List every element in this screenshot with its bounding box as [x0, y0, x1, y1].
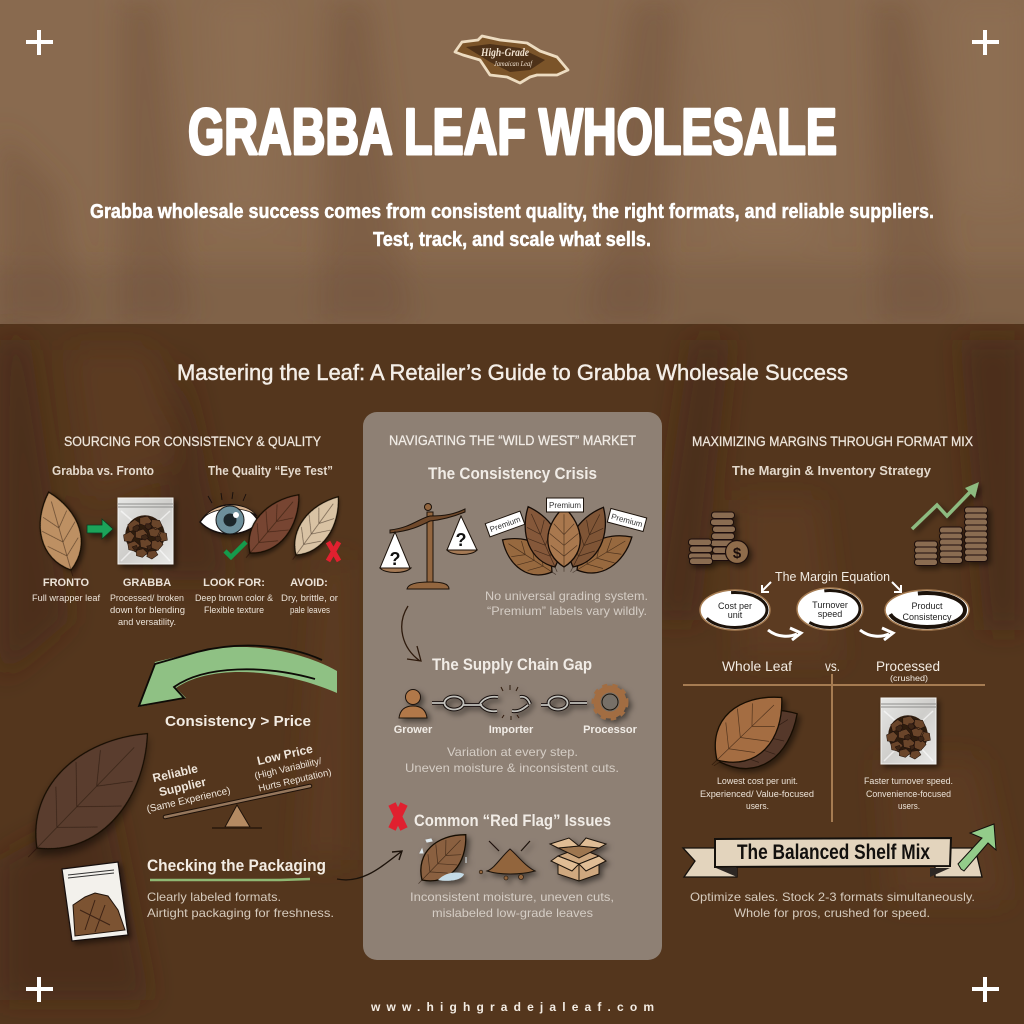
labels: look for: LOOK FOR:: [203, 577, 265, 589]
labels: grabba: Processed/ broken: [110, 593, 184, 603]
comparison header: (crushed): [890, 673, 928, 683]
icon: eye: [200, 492, 259, 534]
background: upper tobacco leaf band: [0, 0, 1024, 345]
icon: grower: [399, 690, 427, 718]
column heading: sourcing: SOURCING FOR CONSISTENCY & QUALITY: [64, 434, 321, 449]
labels: look for: [195, 577, 273, 615]
icon: dark leaf: [3, 709, 173, 882]
subheading: margin and inventory strategy: The Margin & Inventory Strategy: [732, 463, 932, 478]
labels: grabba: down for blending: [110, 605, 185, 615]
text: checking the packaging: Airtight packaging for freshness.: [147, 906, 334, 920]
text: checking the packaging: Clearly labeled formats.: [147, 890, 281, 904]
arrows: equation flow: [768, 628, 893, 640]
comparison grid lines: [683, 674, 985, 822]
subtitle: [90, 201, 934, 251]
arrows: equation pointers: [762, 582, 901, 592]
labels: grabba: and versatility.: [118, 617, 176, 627]
banner: balanced shelf mix: [683, 838, 982, 877]
subtitle: Grabba wholesale success comes from consistent quality, the right formats, and reliable suppliers.: [90, 201, 934, 223]
labels: supply chain stages: [394, 724, 638, 736]
text: checking the packaging: Checking the Packaging: [147, 857, 326, 875]
icon: banner green arrow: [958, 824, 996, 871]
seesaw diagram: [139, 739, 332, 828]
text: balanced shelf description: Whole for pros, crushed for speed.: [734, 906, 930, 920]
subheading: red flag issues: Common “Red Flag” Issues: [414, 812, 611, 830]
icon: fan of premium leaves: Premium: [549, 501, 581, 510]
panel background: [363, 412, 662, 960]
icon: coin stacks with dollar: $: [733, 545, 742, 562]
comparison header: Processed: [876, 658, 940, 674]
seesaw diagram: Hurts Reputation): [257, 767, 332, 794]
text: balanced shelf description: Optimize sales. Stock 2-3 formats simultaneously.: [690, 890, 975, 904]
text: whole leaf notes: Experienced/ Value-focused: [700, 789, 814, 799]
text: whole leaf notes: users.: [746, 801, 769, 811]
icon: fan of premium leaves: Premium: [489, 515, 522, 534]
text: variation: Uneven moisture & inconsistent cuts.: [405, 761, 619, 775]
text: red flag description: mislabeled low-grade leaves: [432, 906, 593, 920]
column heading: margins: MAXIMIZING MARGINS THROUGH FORMAT MIX: [692, 434, 973, 449]
comparison header: Whole Leaf: [722, 658, 792, 674]
icon: growth chart with arrow: [912, 482, 988, 566]
labels: avoid: pale leaves: [290, 605, 330, 615]
logo: Jamaica-shaped High-Grade badge: [455, 36, 568, 83]
text: no universal grading: “Premium” labels vary wildly.: [487, 604, 647, 618]
labels: grabba: GRABBA: [123, 577, 171, 589]
text: red flag description: Inconsistent moisture, uneven cuts,: [410, 890, 614, 904]
icon: gear: [594, 686, 626, 718]
labels: look for: Deep brown color &: [195, 593, 273, 603]
arrow: packaging to red flags: [337, 851, 402, 880]
banner: balanced shelf mix: The Balanced Shelf Mix: [737, 841, 930, 864]
subheading: consistency crisis: The Consistency Crisis: [428, 465, 597, 483]
icon: broken chain: [432, 685, 587, 720]
oval: product consistency: [885, 590, 969, 630]
icon: uneven cuts pile: [479, 841, 535, 880]
icon: coin stacks with dollar: [688, 512, 748, 564]
icon: processed bag: [881, 698, 936, 764]
text: red flag description: [410, 890, 614, 920]
text: no universal grading: No universal grading system.: [485, 589, 648, 603]
text: variation: [405, 745, 619, 775]
curved arrow: crisis to supply chain: [402, 606, 421, 661]
seesaw diagram: (High Variability/: [254, 756, 323, 782]
labels: supply chain stages: Importer: [489, 724, 534, 736]
panel: navigating the wild west market: [363, 412, 662, 960]
icon: grabba bag: [118, 498, 173, 564]
labels: avoid: Dry, brittle, or: [281, 593, 338, 603]
comparison header: vs.: [825, 658, 840, 674]
icon: fronto leaf: [30, 487, 91, 582]
text: checking the packaging: [147, 857, 334, 920]
text: no universal grading: [485, 589, 648, 618]
text: variation: Variation at every step.: [447, 745, 578, 759]
subheading: grabba vs fronto: Grabba vs. Fronto: [52, 463, 154, 478]
oval: product consistency: Consistency: [902, 612, 952, 622]
text: processed notes: users.: [898, 801, 920, 811]
icon: fan of premium leaves: Premium: [610, 512, 644, 529]
seesaw diagram: Reliable: [151, 761, 199, 785]
seesaw diagram: Supplier: [157, 775, 208, 799]
main heading: Mastering the Leaf: A Retailer’s Guide to Grabba Wholesale Success: [177, 360, 848, 385]
labels: fronto: Full wrapper leaf: [32, 593, 101, 603]
oval: product consistency: Product: [911, 601, 943, 611]
icon: pale leaf: [281, 488, 350, 568]
oval: turnover speed: speed: [818, 609, 842, 619]
icon: fan of premium leaves: [485, 498, 647, 587]
label: margin equation: The Margin Equation: [775, 569, 890, 584]
oval: cost per unit: unit: [728, 610, 743, 620]
labels: fronto: FRONTO: [43, 577, 90, 589]
oval: cost per unit: Cost per: [718, 601, 752, 611]
labels: avoid: AVOID:: [290, 577, 328, 589]
text: processed notes: Convenience-focused: [866, 789, 951, 799]
icon: packaging bag: [62, 862, 128, 941]
panel: maximizing margins through format mix: [683, 434, 996, 920]
icon: balance scale: ?: [456, 530, 466, 550]
labels: fronto: [32, 577, 101, 603]
icon: red flag x: [392, 804, 404, 829]
labels: grabba: [110, 577, 185, 627]
seesaw diagram: Low Price: [256, 742, 314, 768]
oval: turnover speed: [797, 588, 863, 630]
subheading: supply chain gap: The Supply Chain Gap: [432, 656, 592, 674]
icon: balance scale: [380, 504, 477, 589]
text: balanced shelf description: [690, 890, 975, 920]
oval: cost per unit: [700, 590, 770, 630]
icon: large curved green arrow: [138, 646, 337, 707]
icon: green check: [225, 542, 246, 557]
labels: supply chain stages: Processor: [583, 724, 638, 736]
oval: turnover speed: Turnover: [812, 600, 848, 610]
text: processed notes: [864, 776, 953, 811]
subheading: eye test: The Quality “Eye Test”: [208, 463, 333, 478]
labels: avoid: [281, 577, 338, 615]
logo: Jamaica-shaped High-Grade badge: High-Grade: [480, 45, 530, 59]
comparison header: [722, 658, 940, 683]
icon: red x: [328, 542, 339, 561]
seesaw diagram: (Same Experience): [146, 785, 232, 815]
panel: sourcing for consistency and quality: [3, 434, 350, 941]
icon: deep brown leaf: [233, 484, 312, 568]
icon: open box: [550, 838, 606, 881]
icon: green arrow: [87, 519, 113, 539]
text: processed notes: Faster turnover speed.: [864, 776, 953, 786]
logo: Jamaica-shaped High-Grade badge: Jamaican Leaf: [494, 60, 533, 68]
text: whole leaf notes: [700, 776, 814, 811]
labels: supply chain stages: Grower: [394, 724, 433, 736]
background: lower dark leaf band: [0, 324, 1024, 1024]
footer url: www.highgradejaleaf.com: [370, 1000, 654, 1014]
column heading: wild west: NAVIGATING THE “WILD WEST” MARKET: [389, 433, 636, 448]
icon: balance scale: ?: [390, 549, 400, 569]
subheading: consistency over price: Consistency > Price: [165, 713, 311, 730]
icon: wet leaf: [406, 823, 478, 895]
icon: whole leaf: [694, 679, 811, 788]
labels: look for: Flexible texture: [204, 605, 264, 615]
subtitle: Test, track, and scale what sells.: [373, 229, 651, 251]
text: whole leaf notes: Lowest cost per unit.: [717, 776, 798, 786]
